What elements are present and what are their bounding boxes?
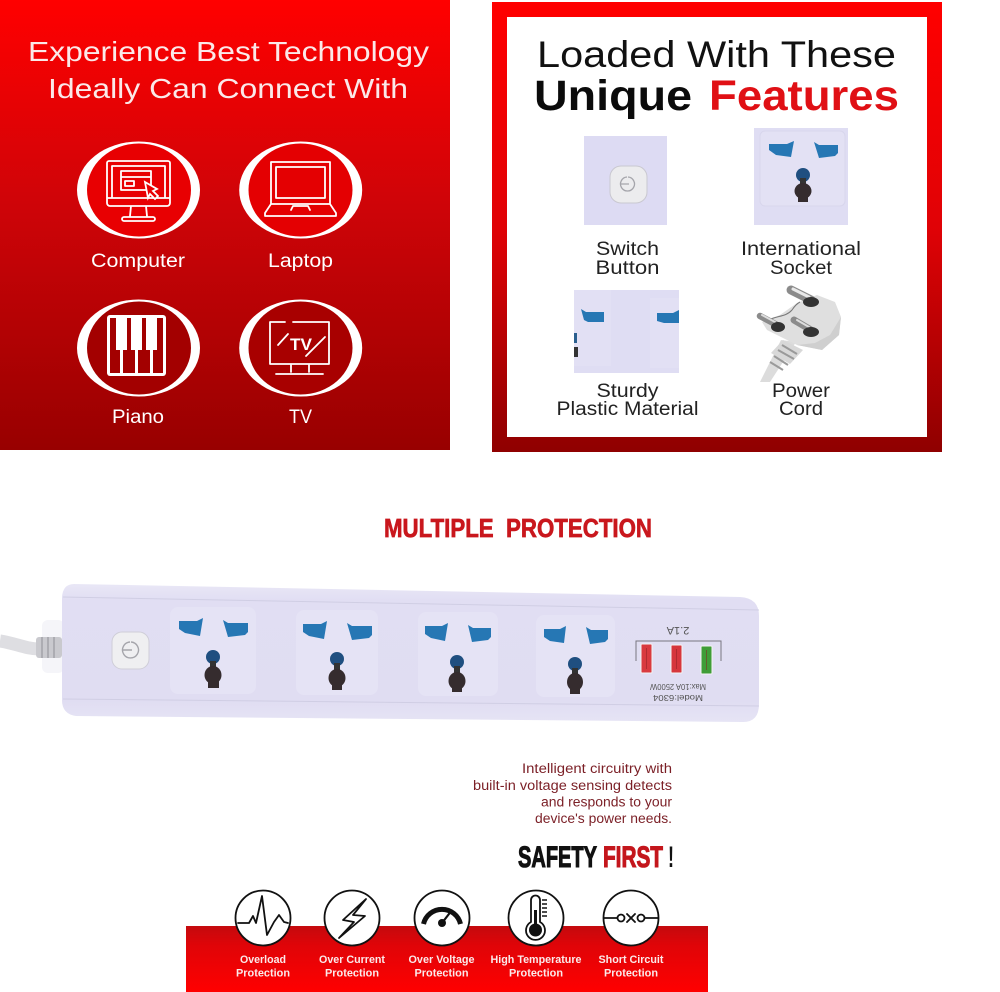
heading: safety first: SAFETY (518, 841, 597, 874)
product photo: power strip (0, 584, 759, 722)
label: sturdy plastic material (556, 381, 698, 420)
panel: unique features (492, 2, 942, 452)
icon: laptop (239, 142, 362, 238)
text block: intelligent circuitry: device's power needs. (535, 811, 672, 826)
label: international socket: Socket (770, 258, 833, 279)
label: switch button (596, 239, 660, 279)
upside-down rating text: Model:6304 (652, 693, 703, 702)
label: power cord: Cord (779, 399, 823, 420)
label: high temperature protection: Protection (509, 968, 563, 980)
label: piano: Piano (112, 407, 164, 428)
icon: over current (324, 890, 380, 946)
label: short circuit protection: Short Circuit (598, 954, 664, 966)
socket 4 (536, 615, 615, 697)
icon: short circuit (604, 890, 658, 946)
label: short circuit protection: Protection (604, 968, 658, 980)
icon: high temperature (508, 890, 564, 946)
label: overload protection (236, 954, 290, 980)
label: power cord: Power (772, 381, 831, 402)
label: international socket: International (741, 239, 861, 260)
image: international socket (754, 128, 848, 225)
heading: safety first: FIRST (603, 841, 663, 874)
label: overload protection: Overload (240, 954, 286, 966)
panel: connectable devices (0, 0, 450, 450)
heading: loaded with these unique features: Loaded With These (537, 34, 896, 75)
upside-down rating text (650, 624, 706, 702)
icon: piano (77, 300, 200, 396)
icon: overload (236, 890, 290, 946)
label: power cord (772, 381, 831, 420)
icon: tv (239, 300, 362, 396)
icon: tv: TV (290, 335, 313, 354)
panel: protection band (186, 890, 708, 992)
heading: loaded with these unique features: Unique (534, 72, 692, 120)
upside-down rating text: 2.1A (666, 624, 689, 636)
socket 2 (296, 610, 378, 695)
heading: safety first: ! (668, 841, 674, 874)
label: over current protection: Over Current (319, 954, 385, 966)
label: over current protection: Protection (325, 968, 379, 980)
label: sturdy plastic material: Sturdy (596, 381, 659, 402)
power cord cable (0, 620, 64, 673)
heading: experience best technology: Experience Best Technology (28, 36, 429, 67)
label: over current protection (319, 954, 385, 980)
label: overload protection: Protection (236, 968, 290, 980)
heading: loaded with these unique features (534, 34, 899, 120)
image: switch button (584, 136, 667, 225)
icon: over voltage (414, 890, 470, 946)
socket 1 (170, 607, 256, 694)
label: computer: Computer (91, 251, 186, 272)
label: switch button: Switch (596, 239, 659, 260)
heading: experience best technology (28, 36, 429, 104)
label: high temperature protection (490, 954, 582, 980)
heading: multiple protection: MULTIPLE PROTECTION (384, 513, 652, 543)
label: tv: TV (289, 407, 312, 428)
label: laptop: Laptop (268, 251, 333, 272)
heading: loaded with these unique features: Features (709, 72, 899, 120)
label: over voltage protection: Over Voltage (408, 954, 474, 966)
strip body (62, 584, 759, 722)
label: sturdy plastic material: Plastic Material (556, 399, 698, 420)
upside-down rating text: Max:10A 2500W (650, 682, 706, 691)
label: over voltage protection (408, 954, 474, 980)
text block: intelligent circuitry: and responds to your (541, 794, 673, 810)
text block: intelligent circuitry: Intelligent circuitry with (522, 761, 672, 776)
image: power cord plug (760, 289, 841, 382)
label: high temperature protection: High Temperature (490, 954, 582, 966)
label: over voltage protection: Protection (414, 968, 469, 980)
icon: computer (77, 142, 200, 238)
heading: experience best technology: Ideally Can Connect With (48, 73, 408, 104)
label: short circuit protection (598, 954, 664, 980)
text block: intelligent circuitry (473, 761, 673, 826)
switch button (112, 632, 149, 669)
usb ports (636, 641, 721, 674)
label: international socket (741, 239, 861, 279)
text block: intelligent circuitry: built-in voltage sensing detects (473, 778, 672, 793)
image: sturdy plastic (574, 290, 679, 373)
label: switch button: Button (596, 258, 660, 279)
socket 3 (418, 612, 498, 696)
